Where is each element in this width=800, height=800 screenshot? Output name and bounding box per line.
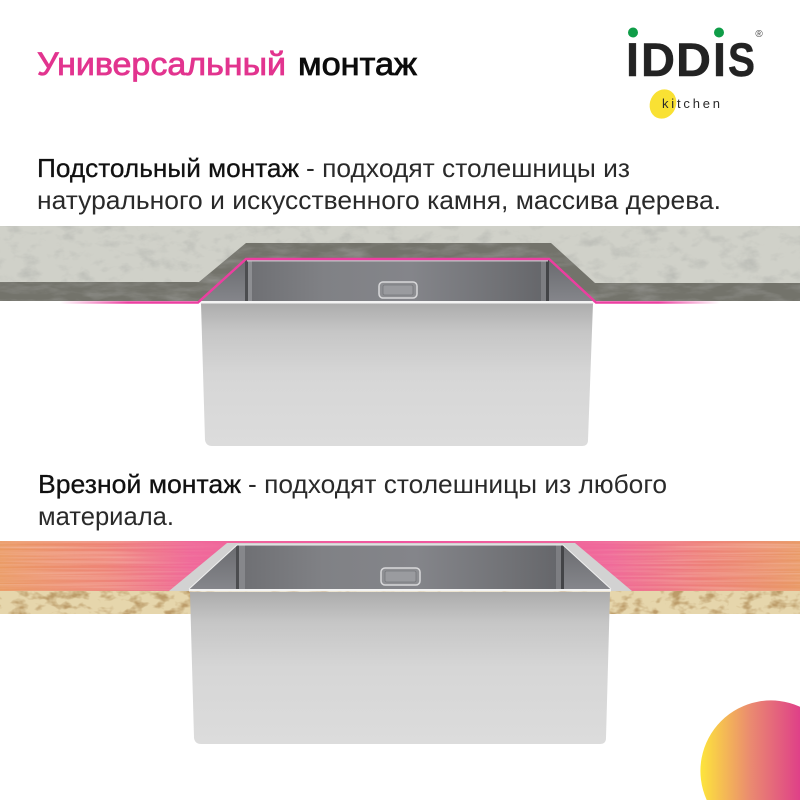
text block: top mount: - подходят столешницы из любого (248, 469, 667, 499)
overflow handle (379, 282, 417, 298)
text block: undermount: - подходят столешницы из (306, 153, 630, 183)
sink flange (169, 543, 632, 591)
title: Универсальный (37, 46, 286, 82)
chipboard layer (0, 591, 800, 614)
logo wordmark: I (626, 33, 639, 86)
top-mount sink illustration (0, 541, 800, 744)
sink rim (189, 545, 611, 592)
wood countertop surface (0, 541, 800, 591)
logo wordmark: D (641, 33, 675, 86)
stone countertop surface (0, 226, 800, 284)
decorative gradient circle (700, 700, 800, 800)
overflow handle (381, 568, 420, 585)
logo wordmark (626, 33, 755, 86)
countertop cut edge (0, 243, 800, 301)
logo green dots (628, 28, 724, 38)
sink interior (199, 260, 594, 302)
title (37, 46, 418, 82)
logo wordmark: D (676, 33, 711, 86)
kitchen wordmark: kitchen (662, 96, 720, 111)
logo: IDDIS kitchen (626, 28, 763, 123)
text block: undermount: натурального и искусственного камня, массива дерева. (37, 185, 721, 215)
registered mark: ® (755, 29, 763, 40)
text block: top mount (38, 469, 667, 531)
sink interior (189, 545, 611, 589)
logo wordmark: S (728, 33, 755, 86)
sink outer body (201, 303, 593, 446)
magenta outline (60, 259, 740, 302)
sink rim (200, 301, 594, 304)
title: монтаж (298, 46, 418, 82)
text block: undermount (37, 153, 721, 215)
text block: top mount: материала. (38, 501, 174, 531)
sink outer body (190, 592, 610, 744)
text block: top mount: Врезной монтаж (38, 469, 242, 499)
undermount sink illustration (0, 226, 800, 446)
logo wordmark: I (713, 33, 726, 86)
text block: undermount: Подстольный монтаж (37, 153, 300, 183)
yellow blob (645, 85, 681, 123)
